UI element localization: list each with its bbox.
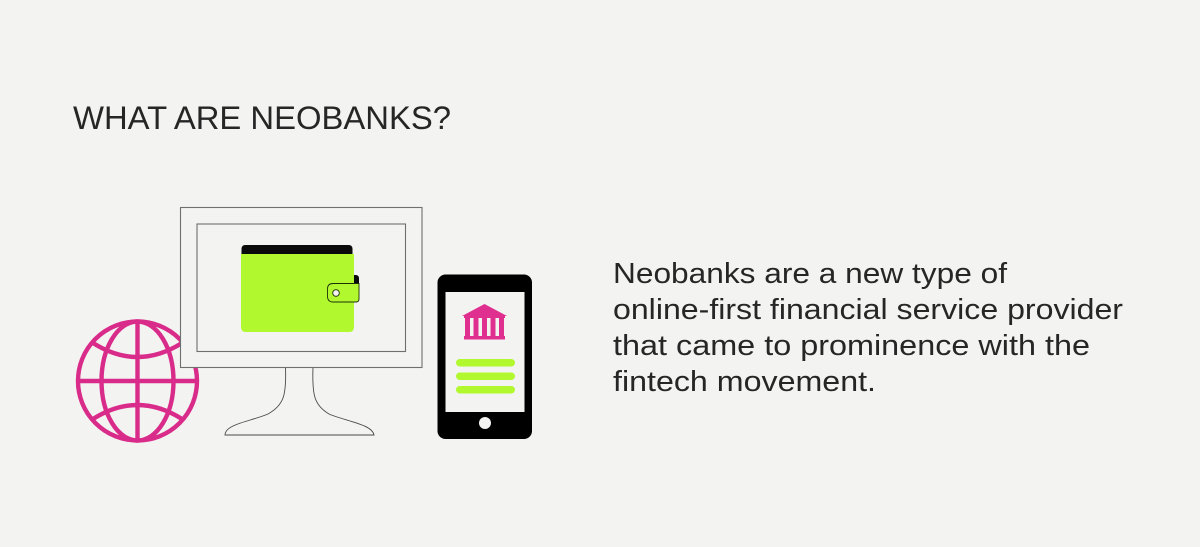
wallet back <box>242 245 352 259</box>
description text: that came to prominence with the <box>613 330 1090 362</box>
title: WHAT ARE NEOBANKS? <box>73 100 451 136</box>
text placeholder bars <box>456 359 515 394</box>
icon: bank <box>462 304 507 340</box>
description text: fintech movement. <box>613 366 876 398</box>
wallet clasp <box>328 284 359 302</box>
phone screen <box>446 292 524 412</box>
icon: desktop monitor <box>180 208 422 435</box>
icon: smartphone <box>438 274 532 439</box>
home button <box>479 417 491 429</box>
clasp button <box>333 290 339 296</box>
wallet body <box>241 254 354 332</box>
description text: Neobanks are a new type of <box>613 258 1008 290</box>
icon: wallet <box>241 245 359 332</box>
monitor screen <box>197 224 406 352</box>
wallet strap back <box>350 275 359 289</box>
icon: globe <box>78 322 197 440</box>
monitor stand <box>225 367 374 435</box>
description text: online-first financial service provider <box>613 294 1123 326</box>
description text <box>613 258 1123 398</box>
monitor frame <box>180 208 422 368</box>
phone body <box>438 274 532 439</box>
